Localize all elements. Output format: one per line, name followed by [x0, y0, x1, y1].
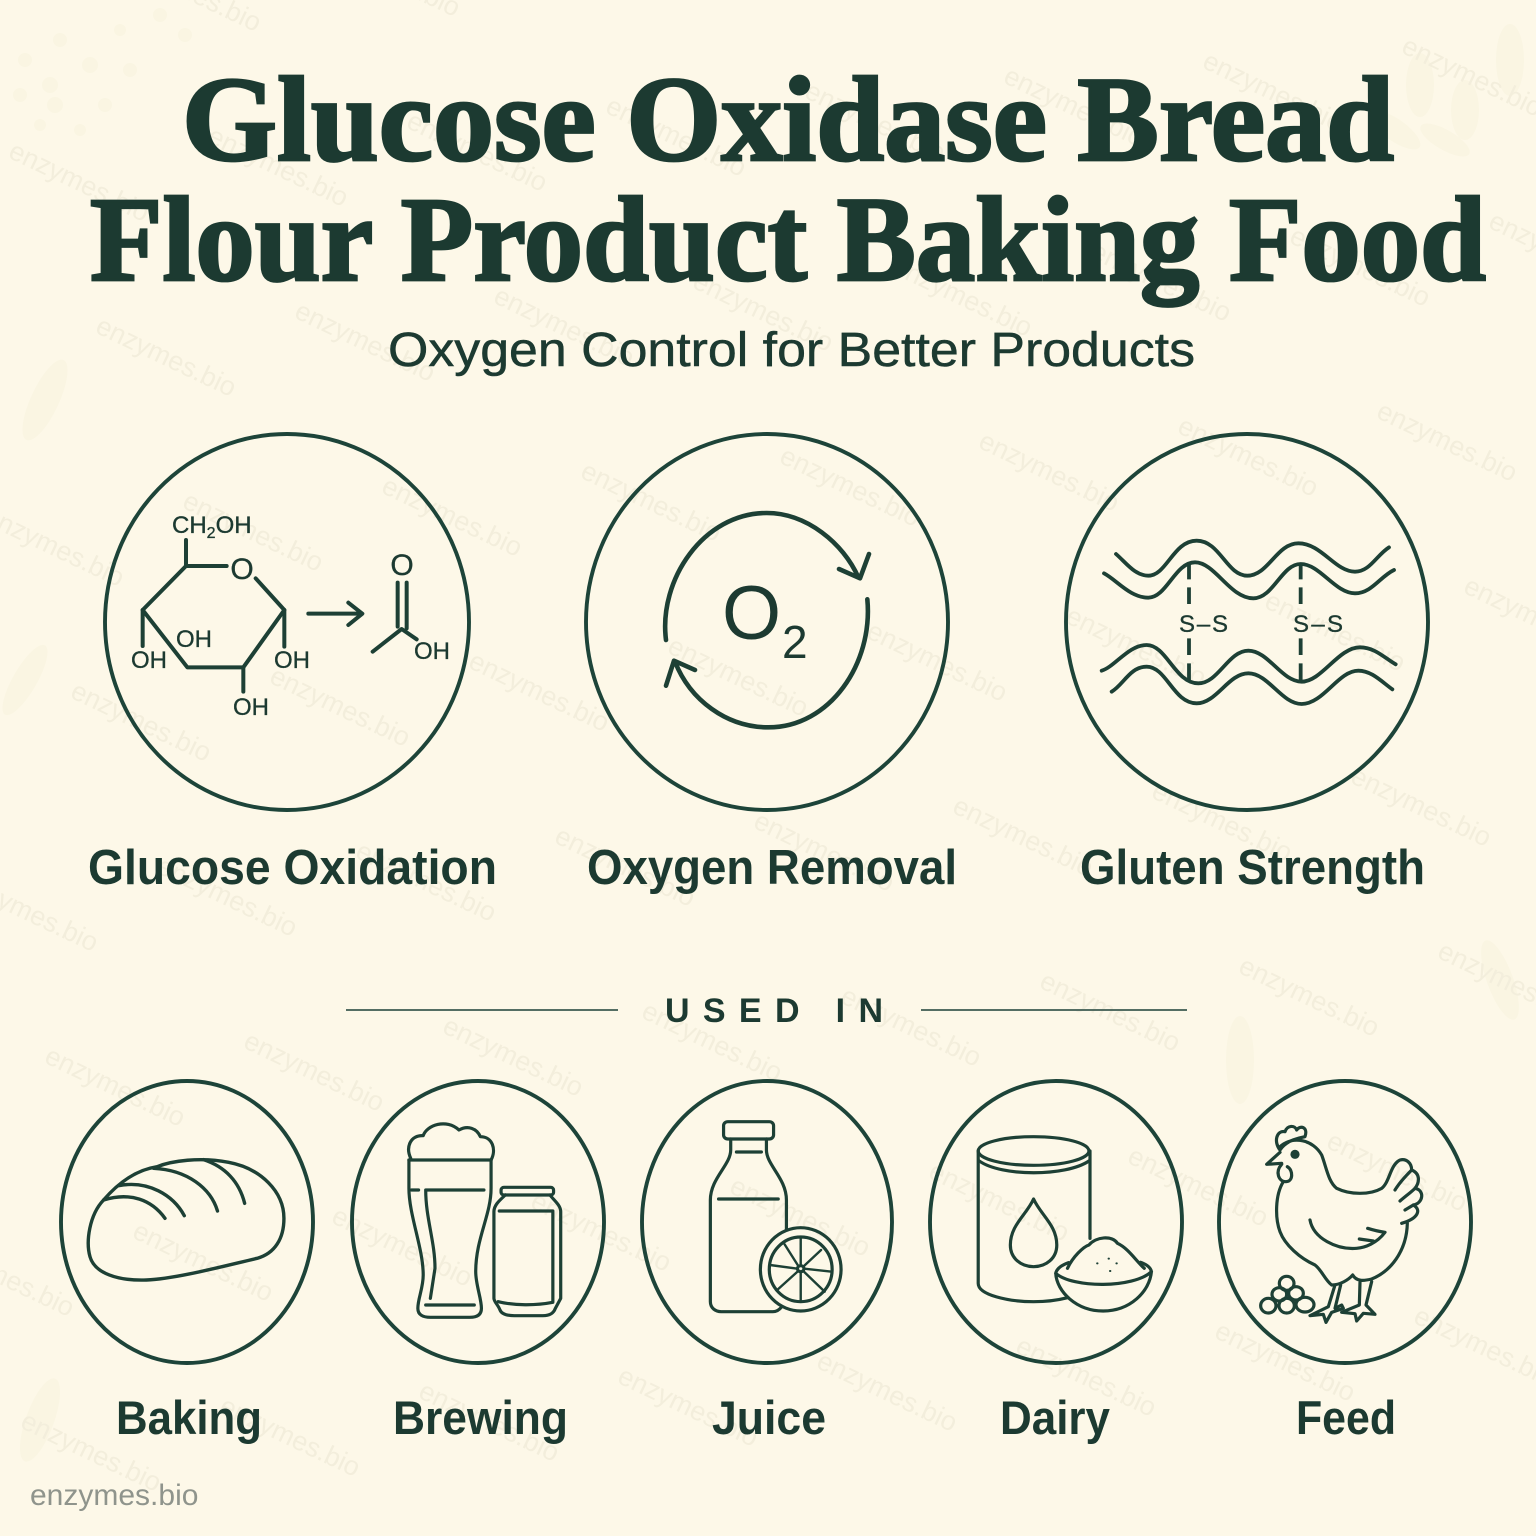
- text: enzymes.bio: [1346, 760, 1496, 853]
- label: gluten strength: Gluten Strength: [1080, 841, 1425, 895]
- icon: glucose molecule to gluconic acid: CH: [172, 512, 207, 539]
- text: enzymes.bio: [637, 995, 787, 1088]
- icon: glucose molecule to gluconic acid: OH: [131, 647, 167, 674]
- text: enzymes.bio: [887, 250, 1037, 343]
- text: enzymes.bio: [402, 105, 552, 198]
- text: enzymes.bio: [1285, 220, 1435, 313]
- text: enzymes.bio: [924, 1155, 1074, 1248]
- text: enzymes.bio: [66, 675, 216, 768]
- text: enzymes.bio: [40, 1040, 190, 1133]
- icon: oxygen cycle: 2: [782, 616, 808, 668]
- label: baking: Baking: [116, 1391, 262, 1444]
- circle: dairy: [930, 1081, 1182, 1363]
- title: Flour Product Baking Food: [90, 173, 1486, 307]
- text: enzymes.bio: [377, 470, 527, 563]
- panel: oxygen removal: [586, 434, 957, 895]
- icon: glucose molecule to gluconic acid: OH: [414, 638, 450, 665]
- text: enzymes.bio: [1210, 1315, 1360, 1408]
- icon: bread loaf: [88, 1160, 284, 1280]
- circle: brewing: [352, 1081, 604, 1363]
- text: enzymes.bio: [4, 135, 154, 228]
- icon: juice bottle and citrus slice: [710, 1122, 841, 1312]
- label: dairy: Dairy: [1000, 1391, 1110, 1444]
- text: enzymes.bio: [1173, 410, 1323, 503]
- subtitle: Oxygen Control for Better Products: [388, 324, 1195, 377]
- text: enzymes.bio: [1123, 1140, 1273, 1233]
- icon: gluten strands with disulfide bonds: S–S: [1293, 611, 1343, 638]
- text: enzymes.bio: [836, 980, 986, 1073]
- circle: feed: [1219, 1081, 1471, 1363]
- text: enzymes.bio: [663, 630, 813, 723]
- footer watermark: enzymes.bio: [30, 1479, 198, 1512]
- icon: glucose molecule to gluconic acid: [131, 512, 450, 721]
- icon: oxygen cycle: [665, 513, 869, 727]
- text: enzymes.bio: [489, 280, 639, 373]
- text: enzymes.bio: [800, 75, 950, 168]
- icon: hen with eggs: [1261, 1126, 1422, 1322]
- text: enzymes.bio: [749, 805, 899, 898]
- label: glucose oxidation: Glucose Oxidation: [88, 841, 497, 895]
- label: feed: Feed: [1296, 1391, 1396, 1444]
- label: juice: Juice: [712, 1391, 826, 1444]
- text: enzymes.bio: [152, 850, 302, 943]
- icon: dairy tub and powder bowl: [978, 1137, 1151, 1311]
- title: Glucose Oxidase Bread: [182, 53, 1394, 187]
- icon: gluten strands with disulfide bonds: [1102, 541, 1396, 704]
- section heading: used in: USED IN: [665, 992, 883, 1030]
- text: enzymes.bio: [948, 790, 1098, 883]
- text: enzymes.bio: [775, 440, 925, 533]
- text: enzymes.bio: [1322, 1125, 1472, 1218]
- text: enzymes.bio: [812, 1345, 962, 1438]
- text: enzymes.bio: [999, 60, 1149, 153]
- icon: glucose molecule to gluconic acid: OH: [216, 512, 252, 539]
- icon: glucose molecule to gluconic acid: OH: [274, 647, 310, 674]
- text: enzymes.bio: [576, 455, 726, 548]
- circle: oxygen removal: [586, 434, 948, 810]
- circle: glucose oxidation: [105, 434, 469, 810]
- text: enzymes.bio: [203, 120, 353, 213]
- text: enzymes.bio: [862, 615, 1012, 708]
- panel: juice: [642, 1081, 892, 1444]
- text: enzymes.bio: [215, 1390, 365, 1483]
- circle: baking: [61, 1081, 313, 1363]
- text: enzymes.bio: [464, 645, 614, 738]
- text: enzymes.bio: [414, 1375, 564, 1468]
- icon: glucose molecule to gluconic acid: OH: [176, 626, 212, 653]
- panel: glucose oxidation: [88, 434, 497, 895]
- text: enzymes.bio: [1147, 775, 1297, 868]
- text: enzymes.bio: [1234, 950, 1384, 1043]
- text: enzymes.bio: [128, 1215, 278, 1308]
- panel: gluten strength: [1066, 434, 1428, 895]
- text: enzymes.bio: [1061, 600, 1211, 693]
- text: enzymes.bio: [725, 1170, 875, 1263]
- text: enzymes.bio: [265, 660, 415, 753]
- label: brewing: Brewing: [393, 1391, 568, 1444]
- panel: baking: [61, 1081, 313, 1444]
- text: enzymes.bio: [178, 485, 328, 578]
- text: enzymes.bio: [327, 1200, 477, 1293]
- text: enzymes.bio: [1011, 1330, 1161, 1423]
- text: enzymes.bio: [550, 820, 700, 913]
- text: enzymes.bio: [526, 1185, 676, 1278]
- icon: oxygen cycle: O: [722, 571, 781, 656]
- text: enzymes.bio: [239, 1025, 389, 1118]
- text: enzymes.bio: [1086, 235, 1236, 328]
- text: enzymes.bio: [974, 425, 1124, 518]
- text: enzymes.bio: [1260, 585, 1410, 678]
- text: enzymes.bio: [601, 90, 751, 183]
- icon: beer glass and can: [409, 1124, 561, 1317]
- title: [90, 53, 1486, 307]
- circle: gluten strength: [1066, 434, 1428, 810]
- panel: feed: [1219, 1081, 1471, 1444]
- text: enzymes.bio: [91, 310, 241, 403]
- circle: juice: [642, 1081, 892, 1363]
- icon: glucose molecule to gluconic acid: O: [230, 553, 254, 586]
- text: enzymes.bio: [16, 1405, 166, 1498]
- panel: dairy: [930, 1081, 1182, 1444]
- icon: glucose molecule to gluconic acid: 2: [207, 525, 216, 542]
- text: enzymes.bio: [351, 835, 501, 928]
- icon: gluten strands with disulfide bonds: S–S: [1179, 611, 1228, 638]
- label: oxygen removal: Oxygen Removal: [587, 841, 957, 895]
- text: enzymes.bio: [438, 1010, 588, 1103]
- icon: glucose molecule to gluconic acid: O: [390, 549, 414, 582]
- text: enzymes.bio: [688, 265, 838, 358]
- icon: glucose molecule to gluconic acid: OH: [233, 694, 269, 721]
- text: enzymes.bio: [1035, 965, 1185, 1058]
- panel: brewing: [352, 1081, 604, 1444]
- text: enzymes.bio: [613, 1360, 763, 1453]
- text: enzymes.bio: [1198, 45, 1348, 138]
- text: enzymes.bio: [290, 295, 440, 388]
- text: enzymes.bio: [1372, 395, 1522, 488]
